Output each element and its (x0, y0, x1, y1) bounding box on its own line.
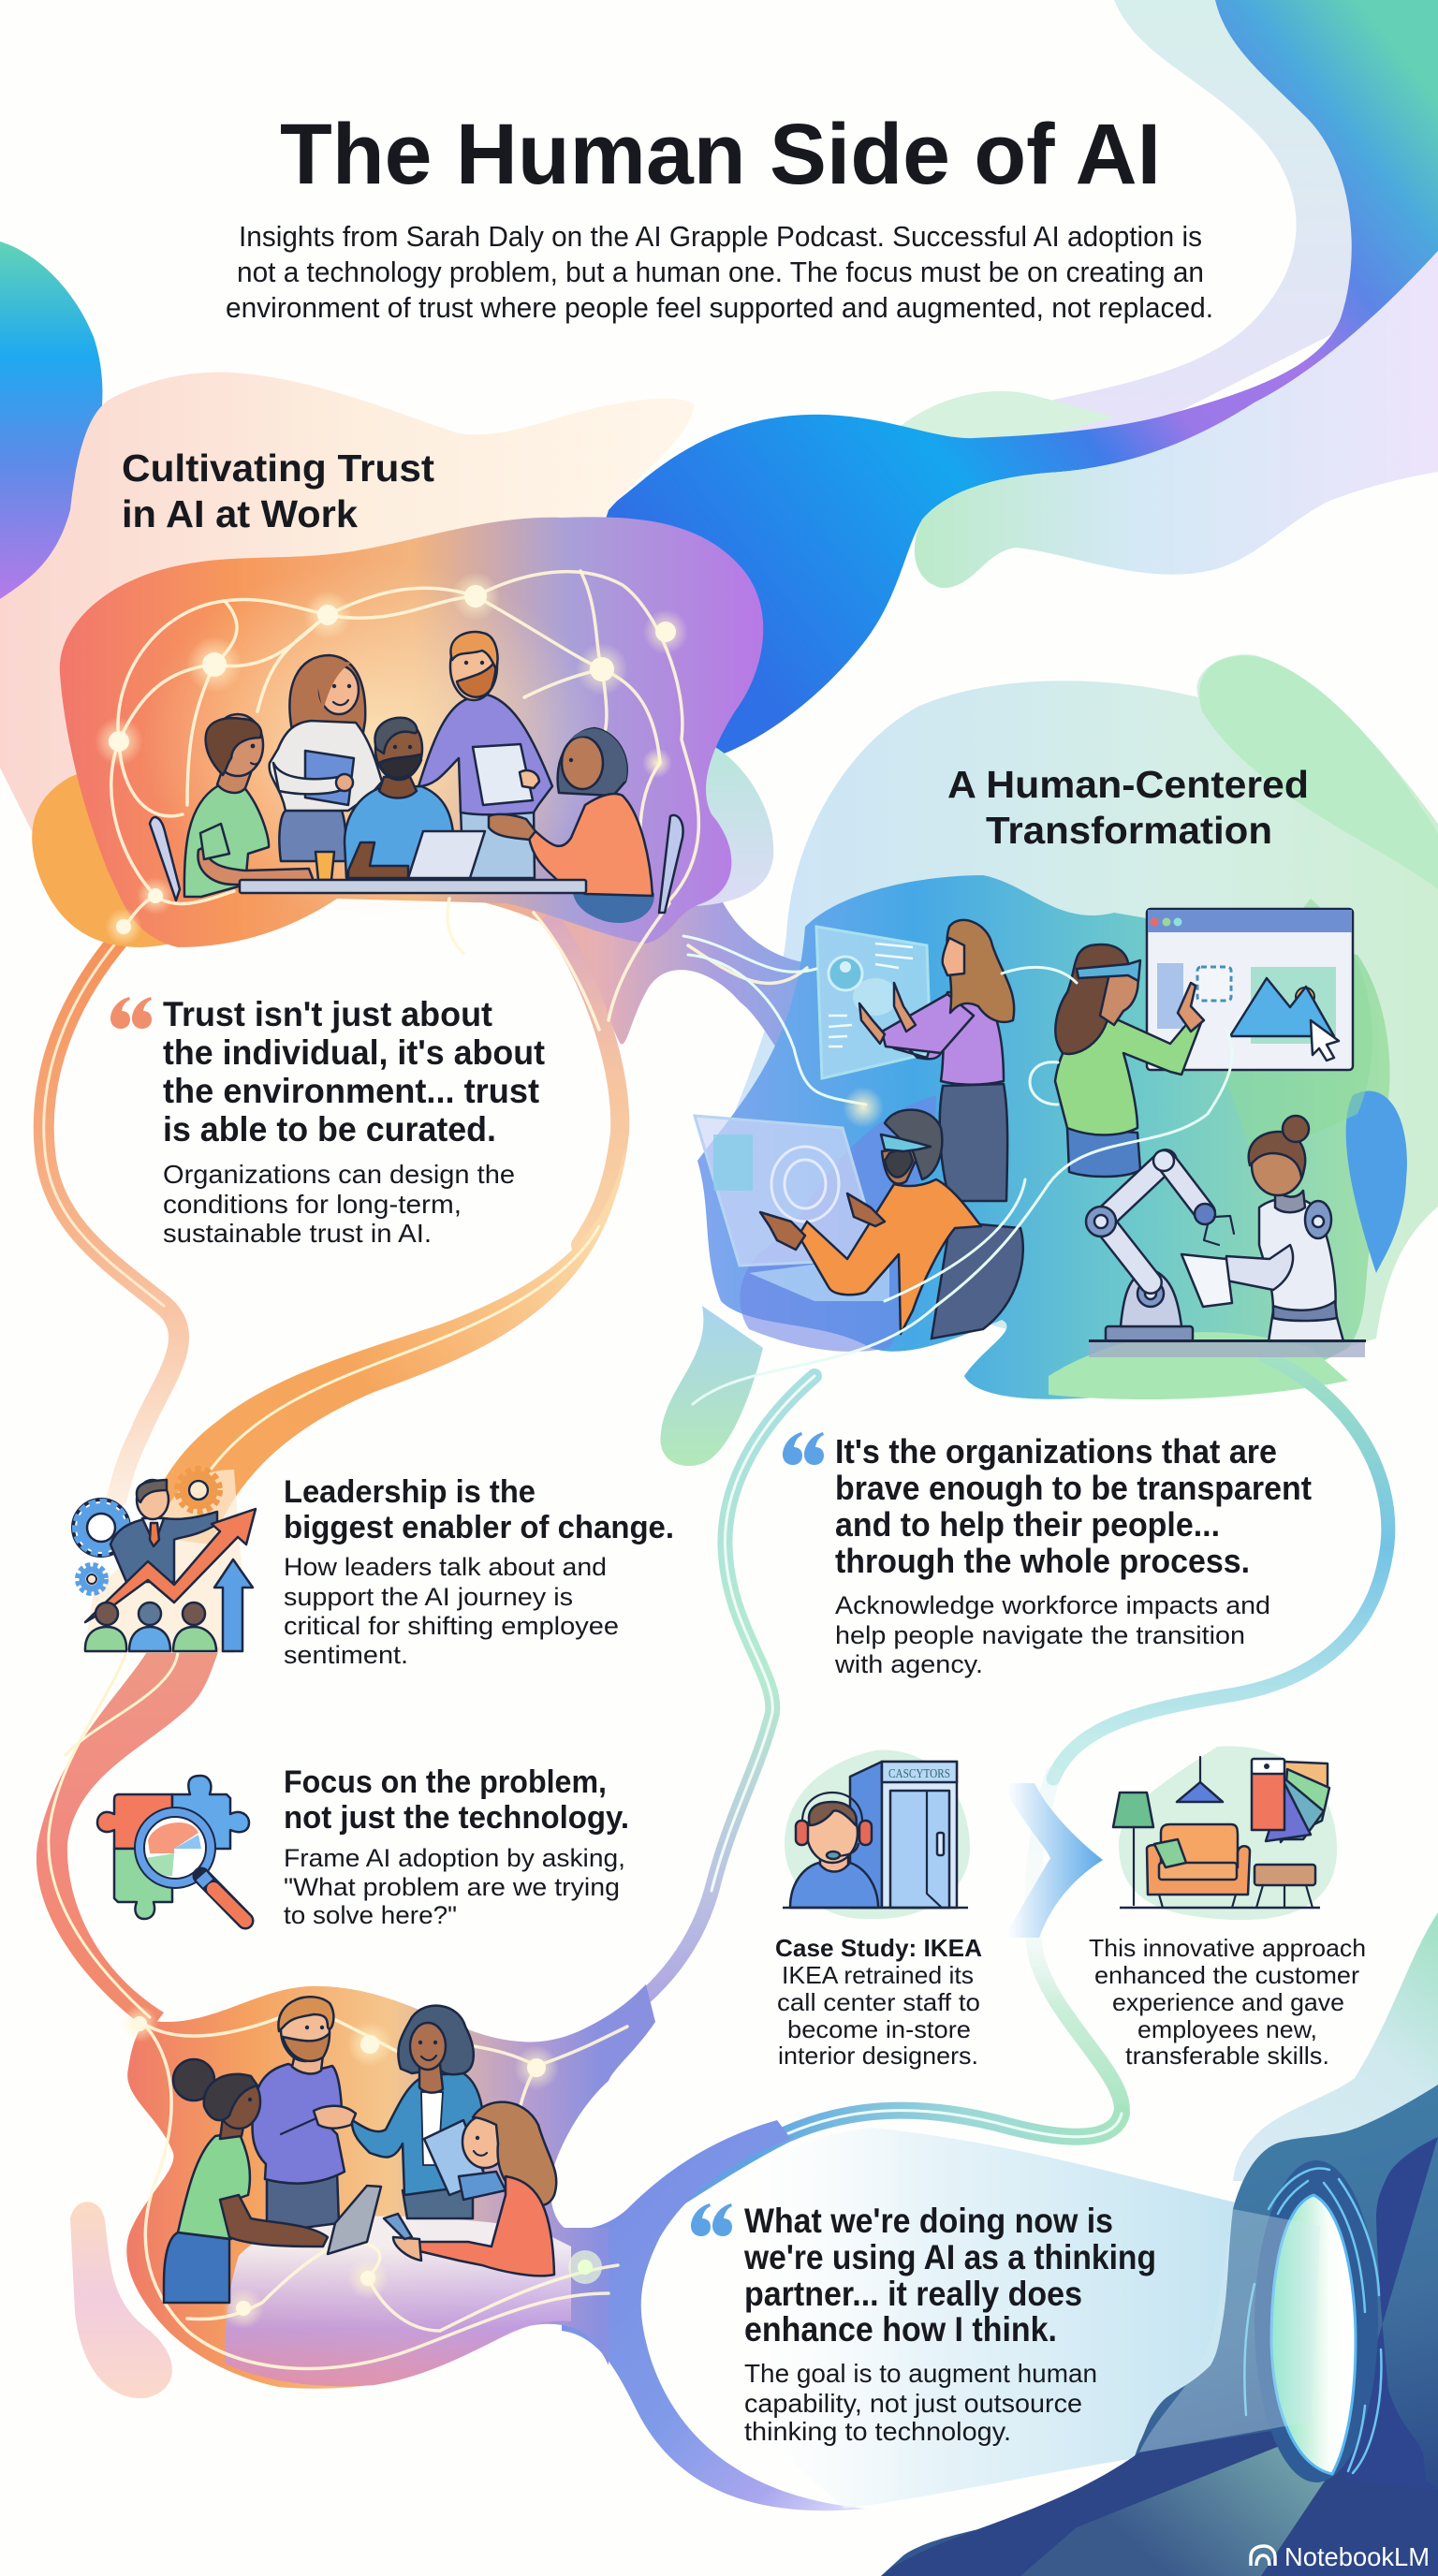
beam over portal (1139, 2209, 1320, 2452)
quote: transparency: and to help their people... (835, 1505, 1220, 1544)
intro paragraph: not a technology problem, but a human one. The focus must be on creating an (237, 256, 1204, 288)
text block: leadership: support the AI journey is (284, 1583, 573, 1611)
quote: thinking partner: enhance how I think. (744, 2310, 1057, 2349)
pale backdrop of transformation section (712, 654, 1438, 1385)
mint lobe top right of transformation (1199, 655, 1438, 889)
quote: thinking partner: thinking to technology. (744, 2417, 1011, 2446)
quote: trust (110, 995, 545, 1248)
portal light (1271, 2195, 1356, 2474)
main blob (60, 517, 763, 947)
text block: leadership (284, 1474, 674, 1669)
quote: transparency: help people navigate the transition (835, 1621, 1245, 1649)
window with image editor (1147, 909, 1353, 1070)
swatch fan (1252, 1759, 1329, 1842)
case study text: call center staff to (777, 1988, 980, 2016)
quote mark (691, 2203, 732, 2236)
audience (85, 1603, 216, 1651)
chairs (150, 815, 683, 913)
deep navy side (1255, 2137, 1438, 2576)
case study outcome text: experience and gave (1112, 1988, 1344, 2016)
heading: human-centered transformation (947, 763, 1309, 852)
robot arm (1086, 1150, 1234, 1341)
quote mark (783, 1432, 824, 1465)
text block: leadership: Leadership is the (284, 1474, 536, 1510)
case study text: become in-store (787, 2015, 971, 2043)
quote: trust: Trust isn't just about (163, 995, 492, 1033)
illustration: people shaking hands (121, 1984, 655, 2389)
quote: trust: Organizations can design the (163, 1160, 515, 1189)
laptop (408, 831, 485, 878)
case study outcome text: employees new, (1137, 2015, 1317, 2043)
notebooklm logo: NotebookLM (1284, 2542, 1430, 2571)
floor light (1020, 2446, 1329, 2576)
text block: leadership: How leaders talk about and (284, 1553, 607, 1581)
quote: thinking partner: partner... it really does (744, 2275, 1082, 2313)
case study outcome text: enhanced the customer (1094, 1961, 1359, 1989)
glowing nodes (95, 572, 688, 945)
glowing swirl lines (683, 936, 1232, 1404)
person: woman with book (270, 655, 382, 861)
heading: human-centered transformation: A Human-Centered (947, 763, 1309, 806)
fork ribbon around the third quote (562, 2120, 866, 2510)
quote: trust: the environment... trust (163, 1072, 539, 1110)
woman in purple (859, 920, 1014, 1201)
woman in robotic suit (1181, 1116, 1343, 1341)
intro paragraph (226, 220, 1213, 324)
orange ribbon left of first quote (44, 936, 179, 1498)
woman in green (164, 2059, 328, 2303)
woman in coral (384, 2102, 556, 2276)
glass of juice (315, 852, 334, 880)
text block: leadership: sentiment. (284, 1641, 408, 1669)
woman with teal jacket (352, 2006, 484, 2218)
quote: trust: the individual, it's about (163, 1033, 545, 1072)
heading: cultivating trust: Cultivating Trust (122, 446, 434, 490)
glass panel: dial (695, 1116, 889, 1301)
quote: thinking partner: we're using AI as a thinking (743, 2238, 1156, 2276)
dark wave (881, 2085, 1438, 2576)
sofa (1147, 1824, 1250, 1908)
work surface (1089, 1339, 1366, 1357)
floor line (1120, 1907, 1320, 1909)
text block: focus on the problem: not just the technology. (284, 1800, 629, 1836)
glow lines (139, 2017, 627, 2368)
case study text: interior designers. (778, 2042, 978, 2070)
peach backdrop behind heading (0, 373, 695, 936)
gears (73, 1470, 219, 1593)
pale lobe on right (637, 739, 773, 906)
heading: human-centered transformation: Transformation (986, 809, 1272, 852)
case study outcome text: transferable skills. (1125, 2042, 1329, 2070)
orange lobe (32, 749, 271, 947)
mint corner above portal (1233, 1912, 1438, 2181)
chair (932, 1222, 1023, 1339)
case study outcome text (1089, 1934, 1366, 2070)
glass panel: profile (816, 927, 931, 1078)
text block: focus on the problem: "What problem are we trying (284, 1873, 620, 1901)
up arrow (214, 1559, 253, 1651)
businessman (110, 1480, 217, 1582)
case study text (775, 1934, 982, 2070)
lower lavender wash (225, 2217, 571, 2386)
icon: call centre agent at store booth (785, 1750, 970, 1919)
icon: puzzle with magnifier (97, 1776, 249, 1921)
portal scene (881, 2085, 1438, 2576)
quote: thinking partner: capability, not just outsource (744, 2389, 1082, 2418)
intro paragraph: Insights from Sarah Daly on the AI Grapple Podcast. Successful AI adoption is (239, 220, 1202, 253)
booth: CASCYTORS (888, 1767, 950, 1781)
left drip (70, 2202, 172, 2398)
quote: transparency: through the whole process. (835, 1542, 1250, 1580)
heading: cultivating trust (122, 446, 434, 535)
blue illustration blob (697, 875, 1407, 1399)
illustration: people working with digital interfaces (683, 909, 1366, 1404)
quote: transparency: brave enough to be transparent (835, 1469, 1312, 1507)
quote: trust: is able to be curated. (163, 1110, 496, 1149)
chevron arrow between case study icons (1002, 1783, 1103, 1938)
quote: trust: conditions for long-term, (163, 1190, 462, 1219)
growth arrow (85, 1509, 256, 1622)
quote: thinking partner (691, 2202, 1156, 2446)
top right flowing blobs (580, 0, 1438, 758)
quote: transparency: Acknowledge workforce impacts and (835, 1591, 1270, 1619)
text block: focus on the problem: Frame AI adoption by asking, (284, 1844, 625, 1872)
man in purple (253, 1997, 356, 2232)
person: standing man purple (418, 632, 552, 878)
side table (1255, 1865, 1315, 1908)
ribbon to the third quote (599, 1774, 1122, 2242)
floor lamp (1113, 1793, 1153, 1905)
text block: leadership: critical for shifting employee (284, 1612, 619, 1640)
ribbon right of second quote (1053, 1356, 1388, 1778)
quote: transparency: with agency. (834, 1650, 983, 1678)
text block: leadership: biggest enabler of change. (284, 1510, 674, 1545)
quote mark (110, 997, 152, 1029)
woman in green with visor (1055, 944, 1204, 1177)
agent (790, 1793, 878, 1908)
left edge blob (0, 242, 102, 599)
pendant lamp (1177, 1757, 1223, 1802)
ribbon left of second quote (562, 1376, 814, 2050)
case study outcome text: This innovative approach (1089, 1934, 1366, 1962)
ribbon joining the two illustrations (446, 893, 824, 1086)
quote: transparency (783, 1432, 1312, 1678)
text block: focus on the problem: Focus on the problem, (284, 1764, 607, 1800)
coral ribbon down the left (37, 1647, 220, 2031)
floor shadow (881, 2424, 1438, 2576)
person: seated man blue (345, 718, 453, 878)
quote: thinking partner: What we're doing now is (744, 2202, 1113, 2240)
icon: leader with growth arrow (73, 1470, 256, 1653)
case study text: IKEA retrained its (782, 1961, 974, 1989)
quote: transparency: It's the organizations that are (835, 1432, 1277, 1471)
title: The Human Side of AI (280, 107, 1161, 202)
portal frame (1255, 2160, 1378, 2482)
orange ribbon right of first quote (140, 922, 625, 1544)
agent floor line (783, 1907, 968, 1909)
table (240, 880, 586, 893)
illustration: team around a table (32, 517, 807, 1030)
blue tail on right (573, 893, 654, 923)
man in orange (760, 1110, 981, 1334)
green drip under transformation (660, 1306, 763, 1466)
network lines (111, 571, 807, 1030)
text block: focus on the problem (284, 1764, 629, 1929)
portal rings (1244, 2169, 1381, 2473)
booth (850, 1762, 957, 1908)
case study text: Case Study: IKEA (775, 1934, 982, 1962)
icon: living room and swatches (1113, 1747, 1337, 1920)
centre glow (140, 562, 609, 917)
heading: cultivating trust: in AI at Work (122, 492, 358, 535)
nodes (121, 2005, 602, 2329)
person: green t-shirt (184, 714, 315, 897)
laptop (328, 2186, 381, 2254)
text block: focus on the problem: to solve here?" (284, 1901, 457, 1929)
blob (126, 1984, 655, 2389)
person: woman coral (489, 728, 653, 896)
quote: thinking partner: The goal is to augment human (744, 2359, 1097, 2388)
intro paragraph: environment of trust where people feel supported and augmented, not replaced. (226, 291, 1213, 324)
quote: trust: sustainable trust in AI. (163, 1219, 432, 1248)
light beam behind third quote (693, 2128, 1287, 2509)
